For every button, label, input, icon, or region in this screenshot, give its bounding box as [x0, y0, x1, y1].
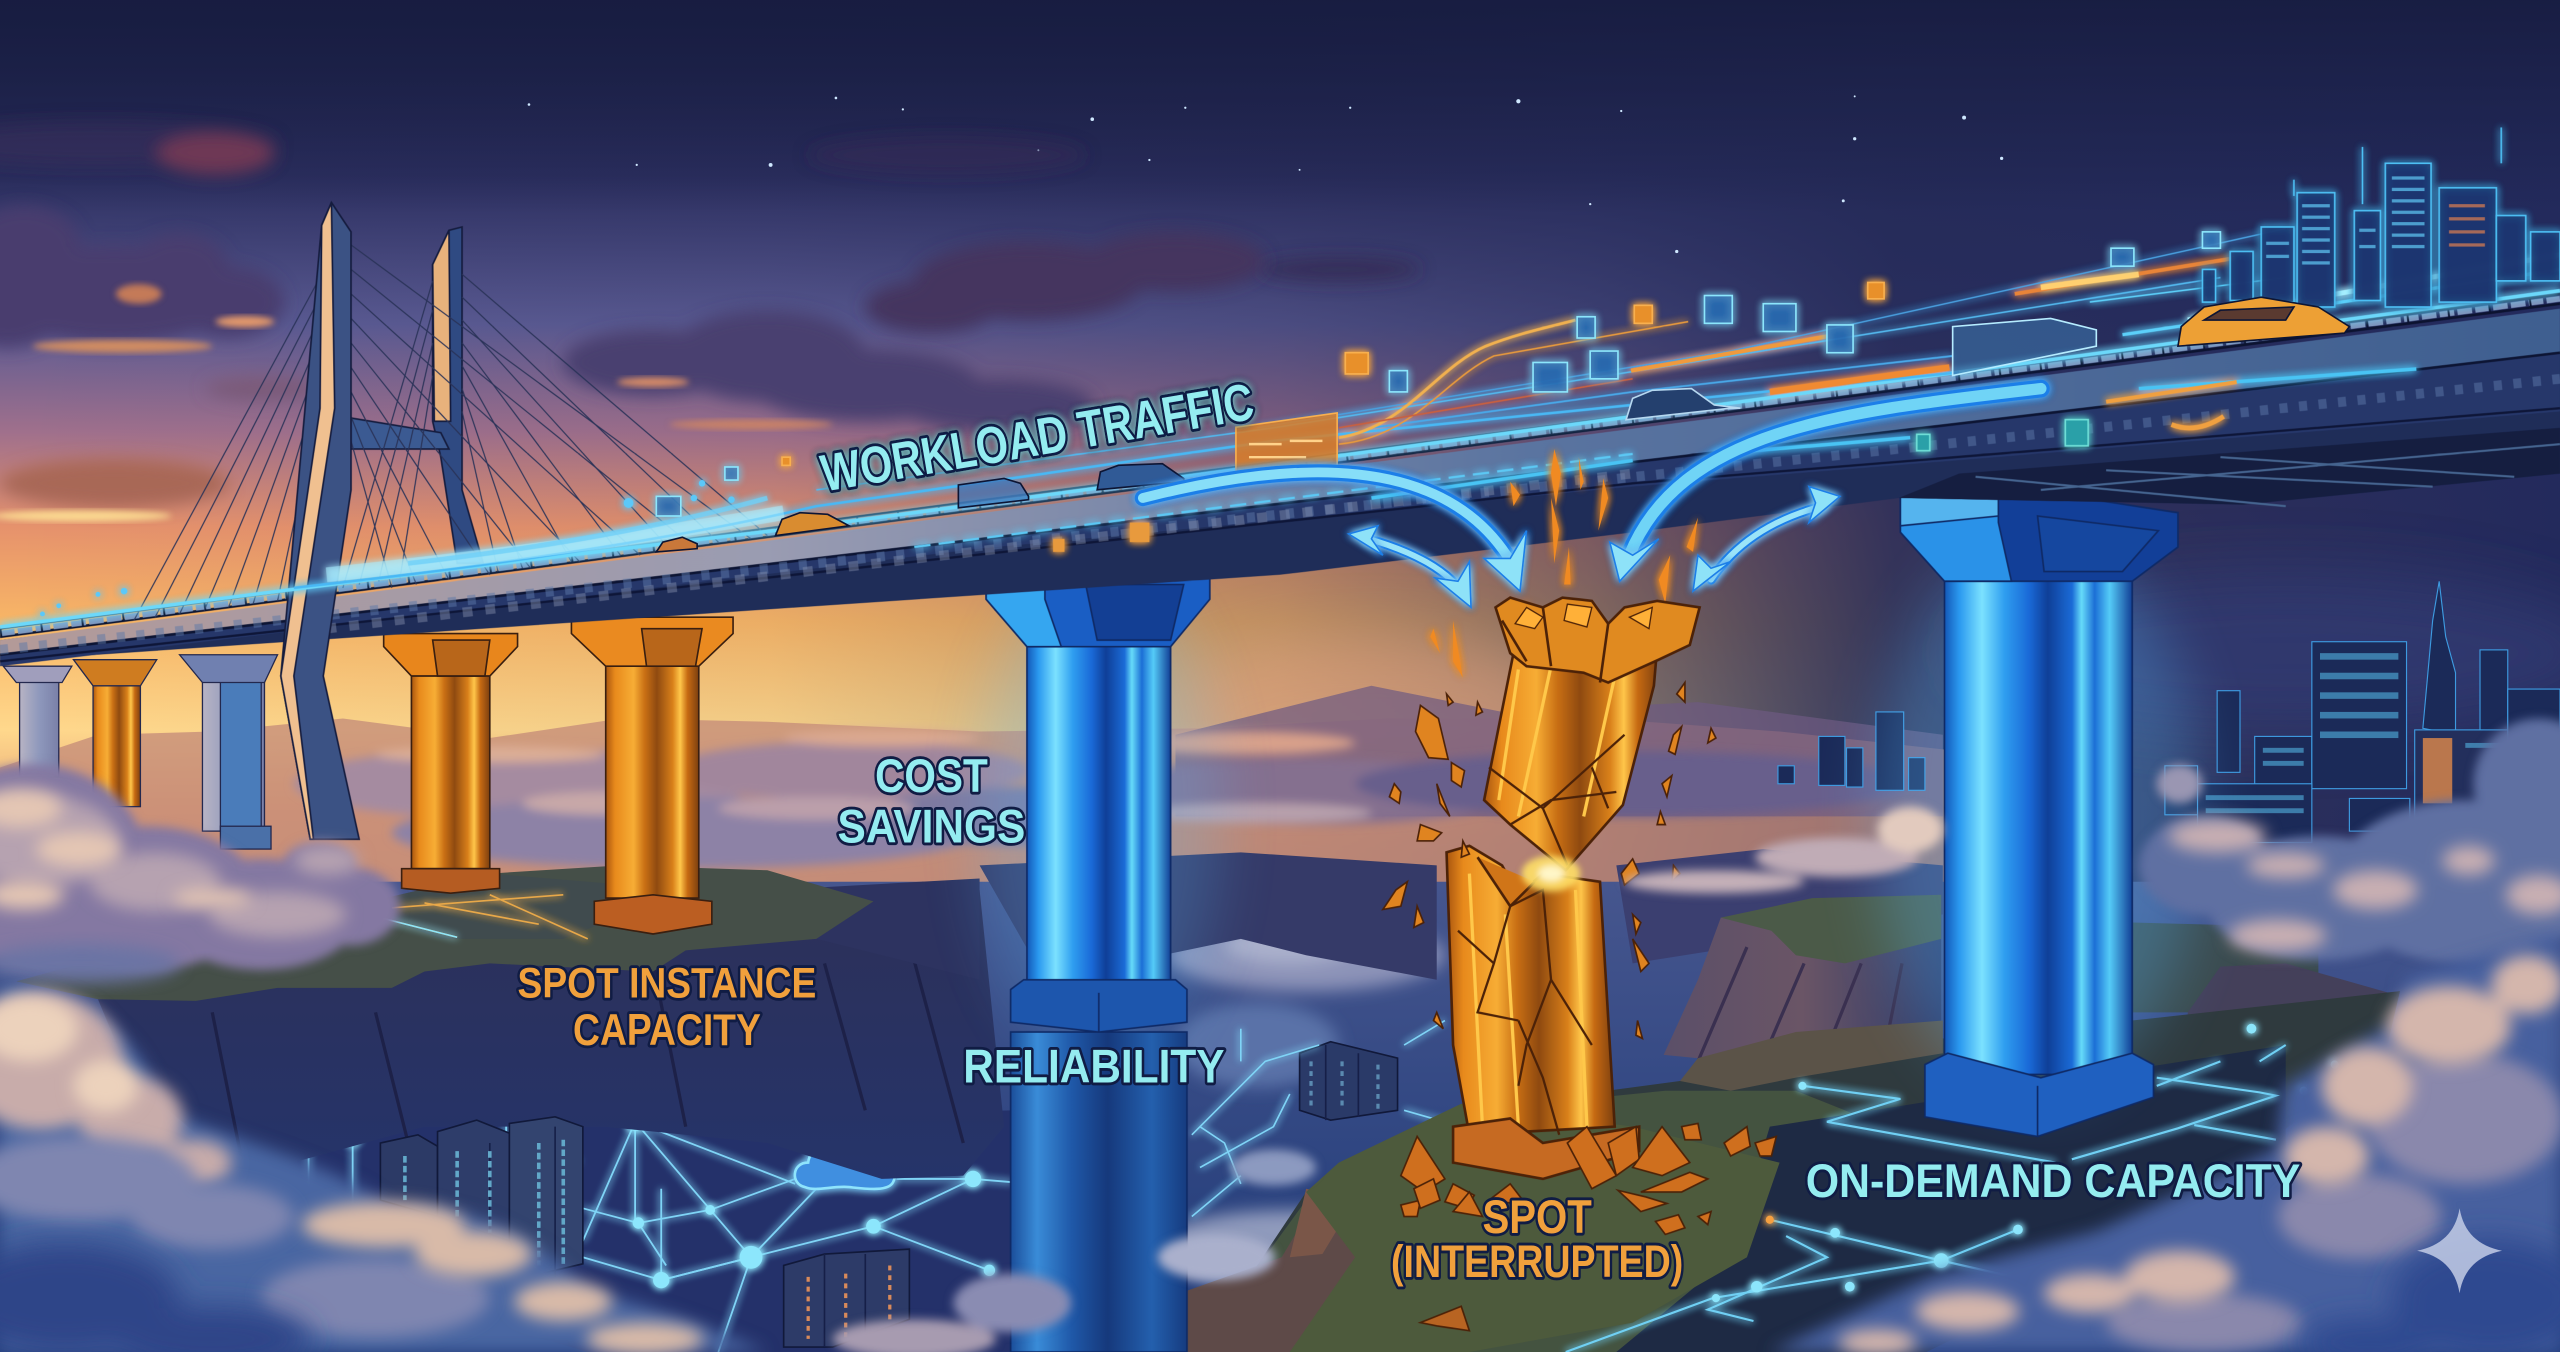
label: on-demand capacity: ON-DEMAND CAPACITY	[1806, 1155, 2300, 1208]
icon: cloud	[795, 1134, 895, 1189]
label: cost savings: COST	[875, 750, 988, 803]
traffic light streams	[0, 229, 2560, 627]
circuit traces on plateau	[367, 895, 588, 939]
icon: sparkle watermark	[2417, 1208, 2502, 1293]
label: cost savings	[838, 750, 1025, 854]
break flash	[1522, 856, 1580, 892]
foreground clouds, lower right	[1770, 934, 2560, 1352]
foreground clouds, upper left	[0, 764, 400, 983]
arrows converging on broken pier	[1143, 389, 2041, 591]
bridge tower cables	[134, 245, 767, 620]
label: spot interrupted: SPOT	[1482, 1191, 1592, 1244]
horizon mountains and distant clouds	[0, 686, 1959, 914]
data cards in traffic	[40, 232, 2220, 616]
spot rocky spur	[1078, 1104, 1780, 1352]
deck railing	[0, 294, 2560, 637]
orange data block	[1236, 413, 1337, 479]
deck truss traffic glow	[914, 369, 2416, 552]
right circuit ground	[1078, 991, 2400, 1352]
bridge tower front	[281, 202, 359, 839]
left cliff grassy plateau	[16, 865, 873, 1001]
network nodes, lower left	[301, 1049, 995, 1288]
flying debris	[1383, 683, 1716, 1038]
circuit nodes, right ground	[1712, 1024, 2339, 1302]
label: spot instance capacity: SPOT INSTANCE	[518, 960, 816, 1007]
digital skyline, upper right	[2202, 127, 2560, 307]
rear right hillside	[2132, 923, 2400, 1032]
left rock backdrop behind network	[212, 1110, 1012, 1352]
orange pier 1	[384, 634, 518, 893]
small far piers	[3, 655, 278, 849]
bridge deck	[0, 309, 2560, 666]
label: spot instance capacity	[518, 960, 816, 1055]
rubble at pier base	[1401, 1123, 1776, 1331]
circuit traces, right ground	[1566, 1045, 2286, 1352]
bridge tower rear	[351, 227, 483, 563]
network lines, centre	[1192, 1021, 1461, 1216]
label: reliability: RELIABILITY	[963, 1041, 1224, 1094]
vehicles on deck	[656, 297, 2349, 552]
circuit network, lower left	[309, 1045, 1012, 1352]
left cliff	[98, 878, 1004, 1179]
sky clouds	[0, 121, 1420, 522]
sparks rising from break	[1430, 449, 1698, 678]
blue pier: reliability	[976, 571, 1221, 1352]
server racks, mid	[1300, 1042, 1398, 1120]
label: spot interrupted: (INTERRUPTED)	[1391, 1236, 1683, 1287]
stars	[528, 95, 2003, 253]
label: spot interrupted	[1391, 1191, 1683, 1287]
label: cost savings: SAVINGS	[838, 801, 1025, 854]
orange pier 2	[571, 617, 733, 934]
abyss and mid-distance fog	[0, 882, 2560, 1352]
broken spot pier, lower section	[1447, 846, 1639, 1179]
far cliff band	[980, 849, 1943, 980]
skyline windows	[2266, 176, 2485, 265]
server racks, lower centre	[784, 1249, 909, 1347]
arrowheads	[1349, 487, 1840, 607]
blue pier: on-demand	[1874, 485, 2201, 1136]
rear right cliff	[1664, 895, 1941, 1061]
distant city skyline, lower right	[1778, 581, 2560, 843]
broken spot pier, upper section	[1484, 598, 1700, 870]
label: spot instance capacity: CAPACITY	[573, 1006, 761, 1055]
foreground clouds, upper right	[2139, 718, 2560, 963]
server racks, left	[380, 1117, 583, 1277]
foreground clouds, lower left	[0, 983, 767, 1352]
label: workload traffic: WORKLOAD TRAFFIC	[817, 373, 1258, 503]
foreground clouds, centre	[833, 807, 1943, 1352]
